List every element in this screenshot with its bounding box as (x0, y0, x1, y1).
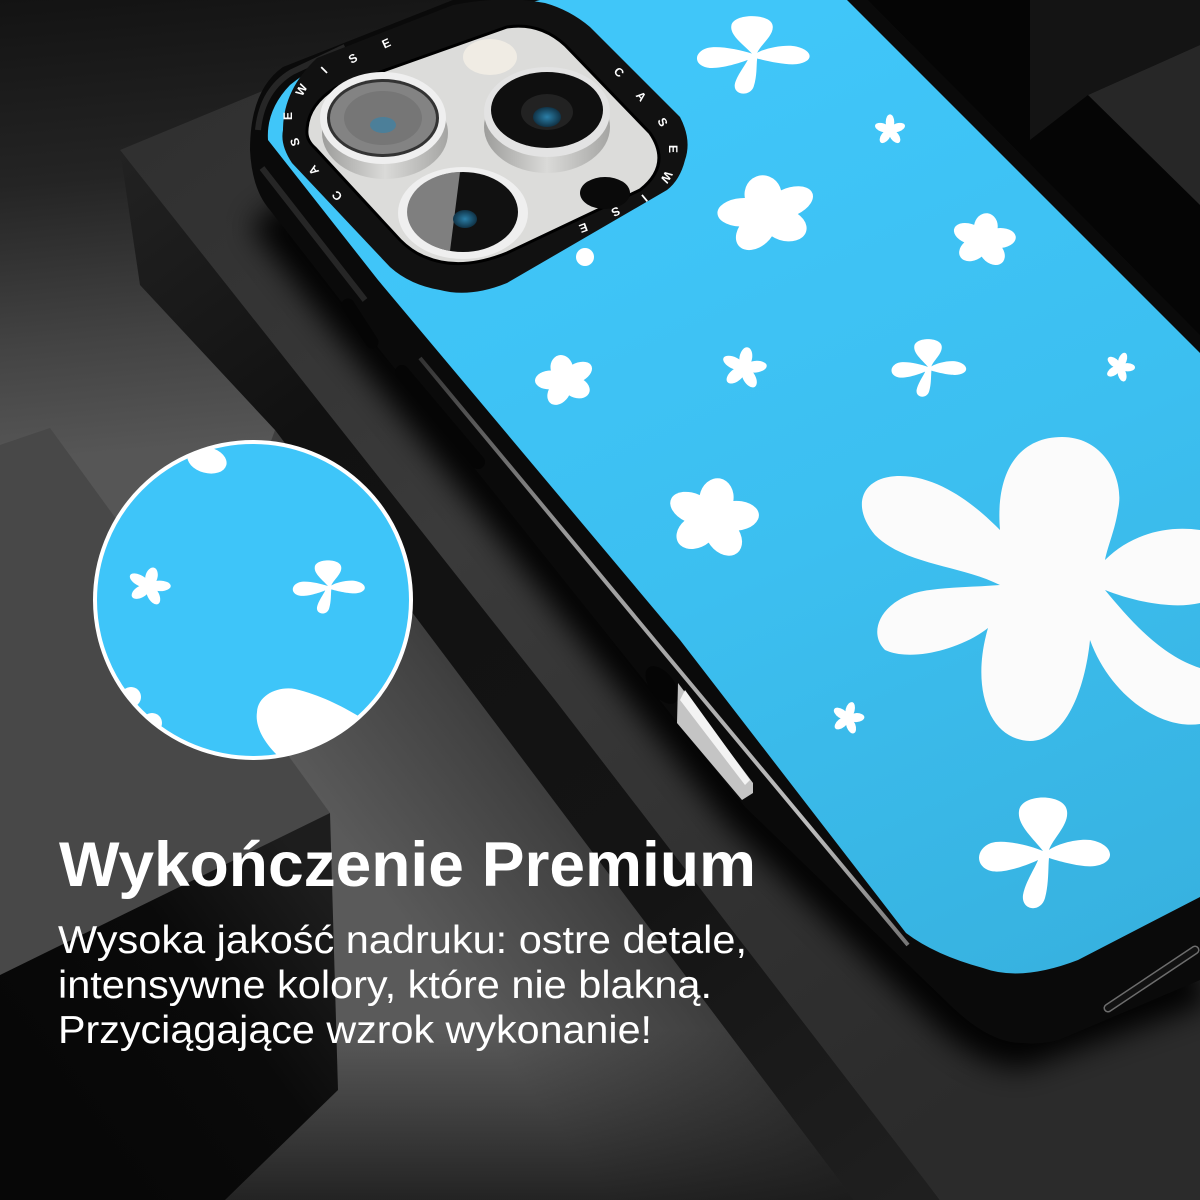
zoom circle detail (95, 442, 411, 770)
phone shadow (270, 210, 1200, 1043)
grey rim (258, 47, 365, 300)
lens: top-right (484, 67, 610, 173)
microphone cut-out (580, 177, 630, 209)
silver edge reflection (420, 358, 908, 945)
brand ring text: E (380, 35, 393, 51)
brand ring text: I (318, 64, 330, 76)
brand ring text: A (633, 89, 649, 105)
block: lower-left plinth (0, 428, 338, 1200)
brand ring text: C (329, 188, 345, 204)
brand ring text: W (657, 169, 675, 186)
description text (58, 919, 747, 1052)
heading: Wykończenie Premium (59, 830, 756, 900)
phone buttons (348, 305, 1195, 1008)
brand ring text: S (346, 50, 360, 67)
brand ring text: S (609, 204, 622, 220)
flower pattern (527, 16, 1200, 908)
description text: Przyciągające wzrok wykonanie! (58, 1009, 652, 1052)
description text: intensywne kolory, które nie blakną. (58, 964, 712, 1007)
brand ring text: E (281, 112, 295, 120)
description text: Wysoka jakość nadruku: ostre detale, (58, 919, 747, 962)
flash (463, 39, 517, 75)
brand ring text: A (305, 162, 322, 178)
brand ring text: S (287, 136, 303, 148)
brand ring text (281, 35, 680, 236)
blue printed back (268, 0, 1200, 973)
camera bump (281, 0, 688, 293)
phone case (250, 0, 1200, 1044)
camera glass (307, 26, 659, 264)
brand ring text: E (577, 220, 590, 236)
brand ring text: I (639, 192, 650, 205)
lens: top-left (320, 72, 448, 179)
brand ring text: E (666, 145, 680, 153)
brand ring text: W (293, 81, 311, 98)
lens: bottom (398, 167, 528, 259)
brand ring text: C (611, 64, 627, 80)
large flower (862, 437, 1200, 741)
brand ring text: S (654, 115, 671, 129)
